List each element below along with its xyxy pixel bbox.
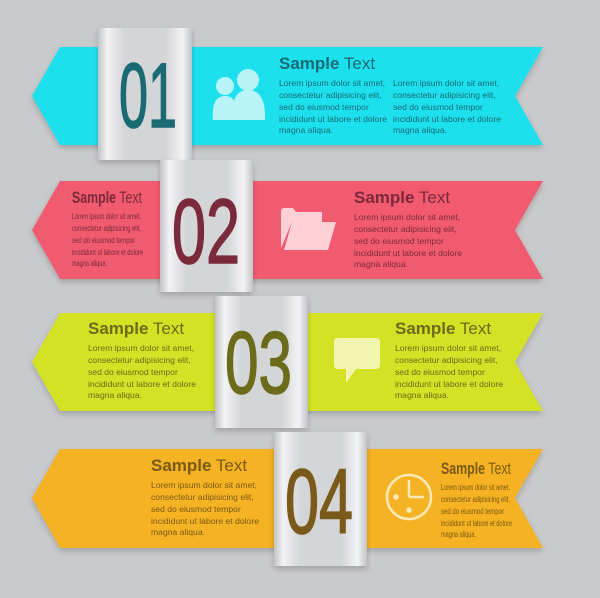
- tab 03: [215, 296, 308, 428]
- text: 03 right heading: Sample Text: [395, 319, 491, 338]
- text: 03 left heading: Sample Text: [88, 319, 184, 338]
- text: 03 left body: Lorem ipsum dolor sit amet,: [88, 343, 194, 353]
- text: 04 left body: Lorem ipsum dolor sit amet,: [151, 480, 257, 490]
- ribbon 04: [32, 449, 543, 548]
- text: 01 column 1: magna aliqua.: [279, 125, 333, 135]
- text: 02 right body: sed do eiusmod tempor: [354, 236, 444, 246]
- icon: folder: [281, 208, 336, 250]
- tab 04: [274, 432, 367, 566]
- text: 04 right heading: Sample Text: [441, 459, 511, 478]
- text: 03 left body: incididunt ut labore et dolore: [88, 379, 196, 389]
- text: 01 column 2: magna aliqua.: [393, 125, 447, 135]
- text: 01 column 1: incididunt ut labore et dolore: [279, 114, 387, 124]
- text: 02 left body: sed do eiusmod tempor: [72, 235, 135, 245]
- panel: 01: [32, 28, 543, 160]
- text: 02 left body: magna aliqua.: [72, 258, 107, 268]
- text: 04 right body: sed do eiusmod tempor: [441, 506, 504, 516]
- panel: 02: [32, 160, 543, 292]
- text: 01 column 1: sed do eiusmod tempor: [279, 102, 369, 112]
- number 01: 01: [119, 45, 177, 147]
- number 03: 03: [225, 313, 292, 412]
- text: 04 right body: consectetur adipisicing elit,: [441, 494, 510, 504]
- ribbon 03: [32, 313, 543, 411]
- panel: 03: [32, 296, 543, 428]
- text: 01 column 2: Lorem ipsum dolor sit amet,: [393, 78, 499, 88]
- text: 03 left body: consectetur adipisicing elit,: [88, 355, 191, 365]
- text: 03 right body: consectetur adipisicing elit,: [395, 355, 498, 365]
- text: 01 heading: Sample Text: [279, 54, 375, 73]
- text: 03 right body: incididunt ut labore et dolore: [395, 379, 503, 389]
- text: 04 left body: consectetur adipisicing elit,: [151, 492, 254, 502]
- tab 01: [98, 28, 192, 160]
- text: 03 left body: magna aliqua.: [88, 390, 142, 400]
- text: 02 right body: magna aliqua.: [354, 259, 408, 269]
- text: 02 right body: Lorem ipsum dolor sit amet,: [354, 212, 460, 222]
- text: 03 left body: sed do eiusmod tempor: [88, 367, 178, 377]
- text: 04 right body: Lorem ipsum dolor sit amet,: [441, 482, 510, 492]
- text: 01 column 2: consectetur adipisicing elit,: [393, 90, 496, 100]
- text: 01 column 1: consectetur adipisicing elit,: [279, 90, 382, 100]
- text: 02 left body: incididunt ut labore et dolore: [72, 247, 143, 257]
- text: 04 left body: incididunt ut labore et dolore: [151, 516, 259, 526]
- text: 04 left body: magna aliqua.: [151, 527, 205, 537]
- text: 01 column 2: sed do eiusmod tempor: [393, 102, 483, 112]
- icon: people: [213, 69, 265, 120]
- ribbon 02: [32, 181, 543, 279]
- number 02: 02: [172, 181, 240, 283]
- text: 02 left body: Lorem ipsum dolor sit amet,: [72, 211, 141, 221]
- text: 04 right body: incididunt ut labore et dolore: [441, 518, 512, 528]
- text: 04 right body: magna aliqua.: [441, 529, 476, 539]
- icon: clock: [387, 475, 431, 519]
- text: 03 right body: Lorem ipsum dolor sit amet,: [395, 343, 501, 353]
- text: 02 left body: consectetur adipisicing elit,: [72, 223, 141, 233]
- text: 02 right body: consectetur adipisicing elit,: [354, 224, 457, 234]
- number 04: 04: [285, 451, 353, 553]
- text: 03 right body: magna aliqua.: [395, 390, 449, 400]
- tab 02: [160, 160, 253, 292]
- text: 01 column 1: Lorem ipsum dolor sit amet,: [279, 78, 385, 88]
- text: 04 left body: sed do eiusmod tempor: [151, 504, 241, 514]
- text: 01 column 2: incididunt ut labore et dolore: [393, 114, 501, 124]
- ribbon 01: [32, 47, 543, 145]
- panel: 04: [32, 432, 543, 566]
- text: 02 right body: incididunt ut labore et dolore: [354, 248, 462, 258]
- text: 02 right heading: Sample Text: [354, 188, 450, 207]
- icon: speech bubble: [334, 338, 380, 383]
- text: 04 left heading: Sample Text: [151, 456, 247, 475]
- text: 03 right body: sed do eiusmod tempor: [395, 367, 485, 377]
- text: 02 left heading: Sample Text: [72, 188, 142, 207]
